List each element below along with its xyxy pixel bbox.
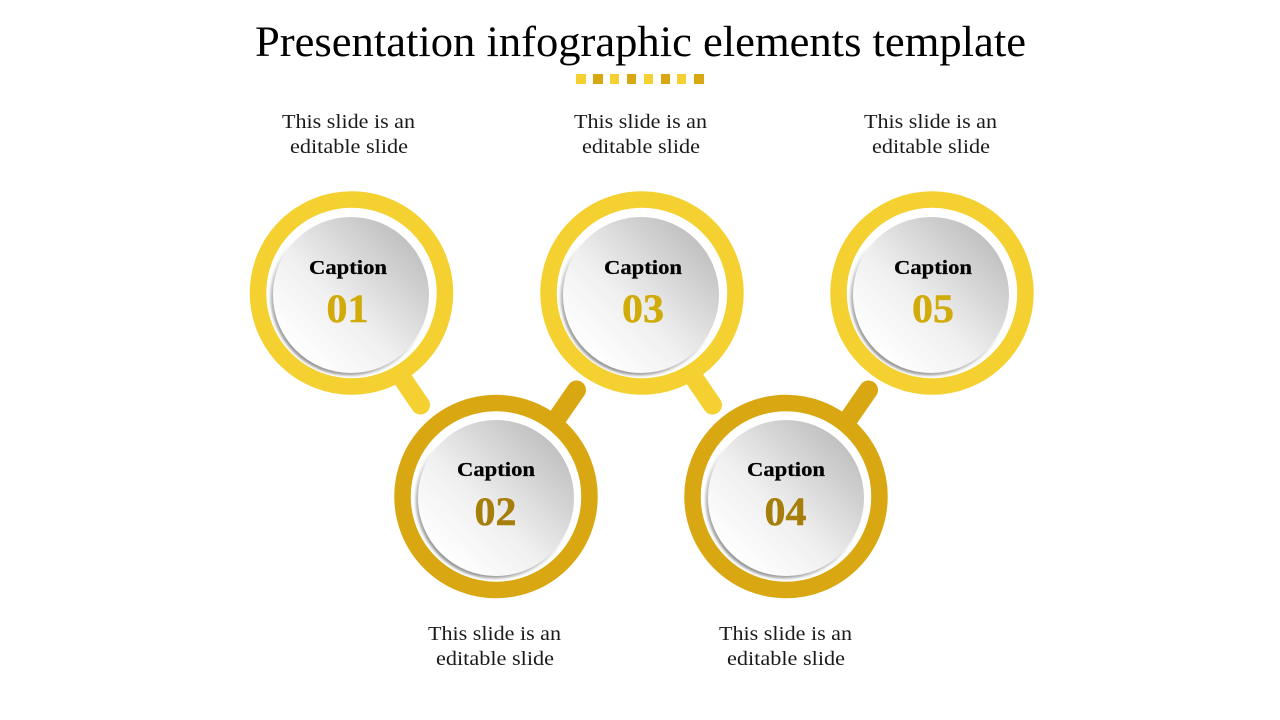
text block: slide 05: editable slide xyxy=(872,136,990,158)
caption 05: Caption xyxy=(894,257,972,279)
caption 02: Caption xyxy=(457,459,535,481)
ring 03 xyxy=(548,200,736,386)
text block: slide 01 xyxy=(282,111,415,158)
text block: slide 02: editable slide xyxy=(436,648,554,670)
title: Presentation infographic elements template xyxy=(255,19,1026,66)
text block: slide 04: This slide is an xyxy=(719,623,852,645)
caption 01: Caption xyxy=(309,257,387,279)
caption 03: Caption xyxy=(604,257,682,279)
number 02: 02 xyxy=(474,489,516,534)
ring 05 xyxy=(838,200,1026,386)
handle 04 xyxy=(845,390,868,424)
number 01: 01 xyxy=(326,286,368,331)
ring 04 xyxy=(692,403,880,590)
disc 01 xyxy=(270,216,430,376)
ring 02 xyxy=(402,403,590,590)
divider squares xyxy=(576,74,704,84)
marker 04 xyxy=(692,390,880,590)
handle 03 xyxy=(690,372,712,405)
disc 03 xyxy=(560,216,720,376)
marker 03 xyxy=(548,200,736,405)
handle 02 xyxy=(553,390,576,424)
marker 01 xyxy=(258,200,445,405)
text block: slide 03: This slide is an xyxy=(574,111,707,133)
text block: slide 01: editable slide xyxy=(290,136,408,158)
text block: slide 05: This slide is an xyxy=(864,111,997,133)
text block: slide 02: This slide is an xyxy=(428,623,561,645)
text block: slide 02 xyxy=(428,623,561,670)
number 04: 04 xyxy=(764,489,806,534)
text block: slide 01: This slide is an xyxy=(282,111,415,133)
handle 01 xyxy=(398,372,420,405)
number 05: 05 xyxy=(912,286,954,331)
number 03: 03 xyxy=(622,286,664,331)
ring 01 xyxy=(258,200,445,386)
marker 05 xyxy=(838,200,1026,386)
text block: slide 04: editable slide xyxy=(727,648,845,670)
text block: slide 03 xyxy=(574,111,707,158)
marker 02 xyxy=(402,390,590,590)
text block: slide 03: editable slide xyxy=(582,136,700,158)
text block: slide 04 xyxy=(719,623,852,670)
caption 04: Caption xyxy=(747,459,825,481)
text block: slide 05 xyxy=(864,111,997,158)
disc 02 xyxy=(416,420,574,578)
disc 04 xyxy=(706,420,864,578)
disc 05 xyxy=(850,216,1010,376)
